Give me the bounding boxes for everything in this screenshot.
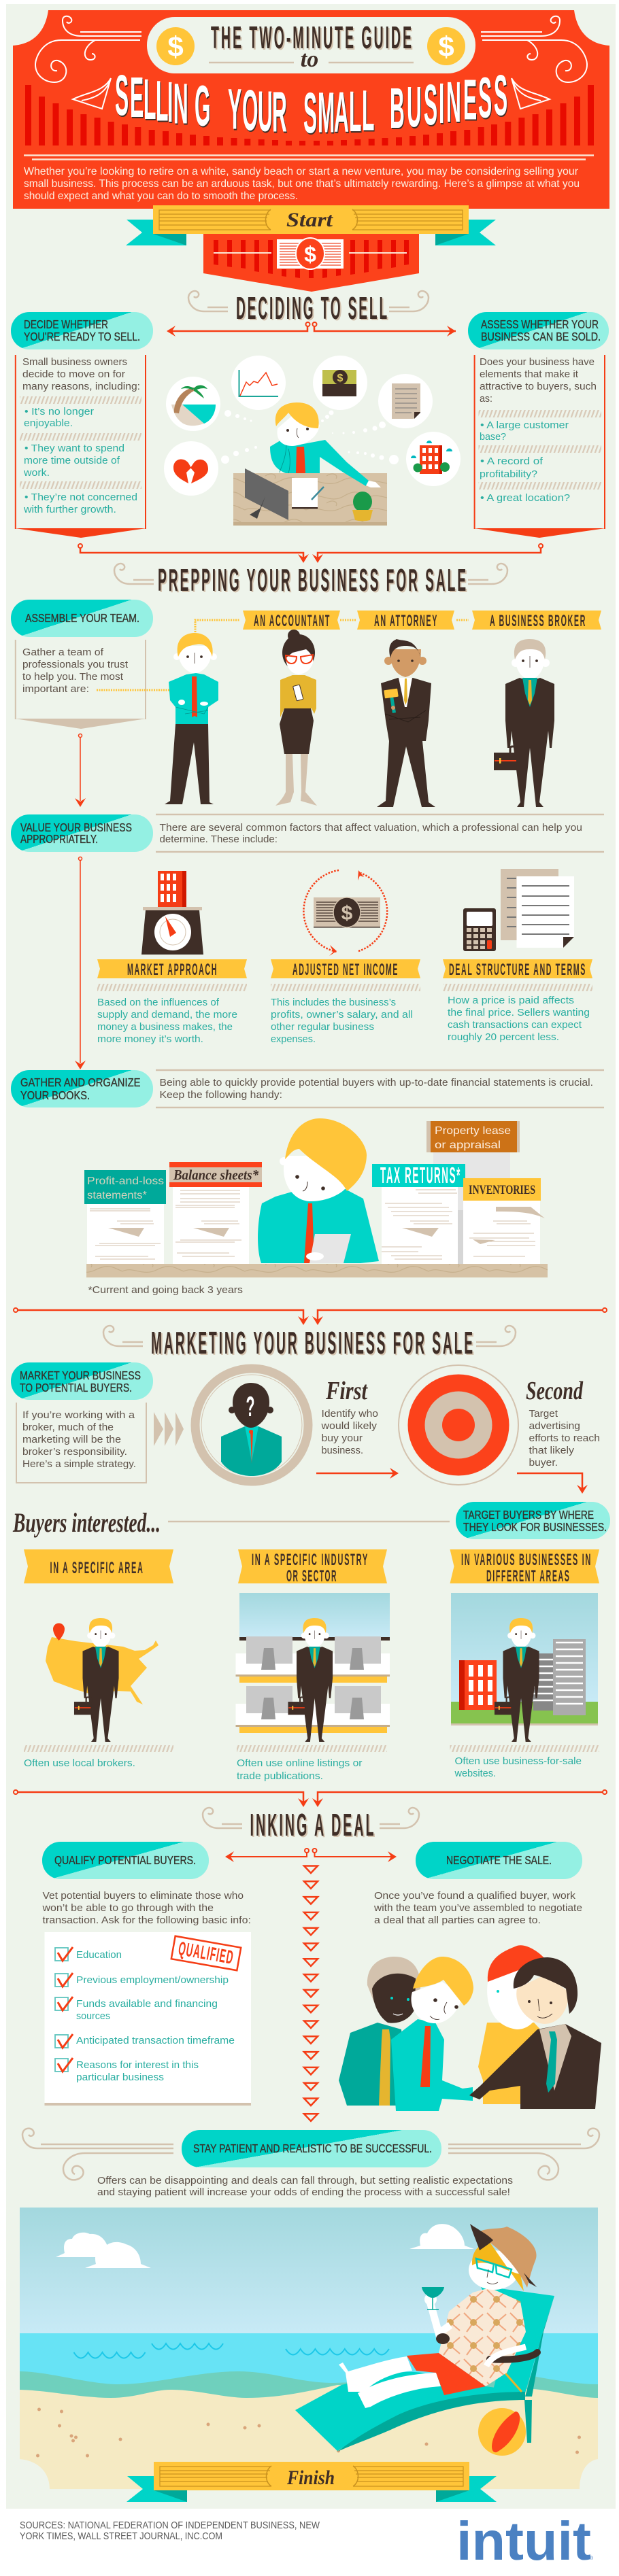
pill: target buyers: [456, 1502, 610, 1539]
arrow: split inking: [225, 1849, 397, 1862]
start pennant: [203, 234, 419, 292]
icon: banknote with cycle arrows: $: [341, 902, 353, 925]
illustration: beach scene: [20, 2208, 598, 2489]
logo: intuit: intuit: [456, 2511, 591, 2571]
panel: reasons to sell: enjoyable.: [24, 417, 73, 429]
figure: blond owner: [165, 633, 218, 804]
person: dark-haired man: [469, 1957, 601, 2109]
stack: property lease: [426, 1121, 520, 1268]
arrow: converge to next section: [78, 544, 543, 563]
banner: accountant: [243, 611, 340, 630]
intro text: [24, 166, 580, 202]
shirt: [270, 440, 369, 486]
footnote: *Current and going back 3 years: [88, 1284, 243, 1296]
text: AN ACCOUNTANT: [254, 612, 331, 630]
icon: broken heart: [173, 460, 208, 483]
text: first step: [320, 1377, 378, 1456]
white scroll ornaments: [35, 16, 587, 109]
icon: cash stack: $: [337, 373, 344, 384]
column: adjusted net income: [271, 959, 420, 1045]
pill: assemble team: ASSEMBLE YOUR TEAM.: [25, 611, 139, 625]
icon: banknote with cycle arrows: [303, 870, 387, 956]
panel: assess the business: base?: [480, 431, 506, 443]
title line two: [115, 64, 507, 145]
panel: assess the business: [474, 355, 605, 538]
panel: broker marketing note: If you’re working with a: [22, 1409, 135, 1421]
flourish: stay patient: [22, 2129, 599, 2180]
column: deal structure: cash transactions can expect: [448, 1019, 582, 1031]
column: adjusted net income: other regular business: [271, 1021, 374, 1033]
panel: assess the business: as:: [480, 393, 492, 405]
panel: qualification checklist: Previous employment/ownership: [76, 1974, 229, 1986]
person: dark-skinned man: [339, 1957, 420, 2106]
text: first step: buy your: [321, 1432, 363, 1444]
text: books intro: Keep the following handy:: [159, 1089, 282, 1101]
text: first step: Identify who: [321, 1408, 378, 1420]
icon: target: [399, 1365, 518, 1485]
panel: reasons to sell: Small business owners: [22, 356, 127, 368]
text: closing advice: and staying patient will increase your odds of ending the process with a successful sale!: [97, 2186, 510, 2198]
icon: cash stack: [322, 370, 356, 396]
intro text: should expect and what you can do to smooth the process.: [24, 190, 298, 202]
column: deal structure: [443, 959, 592, 1043]
column: adjusted net income: expenses.: [271, 1033, 316, 1045]
icon: line graph: [239, 370, 278, 396]
sources: [20, 2520, 320, 2542]
pill: decide whether: YOU’RE READY TO SELL.: [24, 330, 140, 343]
panel: broker marketing note: Here’s a simple strategy.: [22, 1458, 136, 1470]
icon: unknown buyer in ring: [195, 1369, 308, 1481]
icon: banknote: $: [304, 242, 316, 267]
ripples: [73, 2343, 389, 2358]
desk: [233, 473, 387, 522]
person: blond man: [391, 1957, 473, 2111]
text: closing advice: [97, 2175, 513, 2198]
double rule: [24, 155, 594, 159]
panel: header: [13, 10, 609, 209]
text: second step: Second: [526, 1377, 584, 1405]
panel: reasons to sell: more time outside of: [24, 455, 120, 466]
panel: reasons to sell: with further growth.: [23, 504, 116, 515]
sea: [20, 2333, 598, 2398]
panel: assess the business: • A record of: [480, 456, 543, 467]
stack: profit and loss: statements*: [87, 1190, 147, 1201]
column: market approach: supply and demand, the more: [97, 1009, 237, 1020]
caption: online listings: Often use online listings or: [237, 1757, 363, 1769]
caption: business-for-sale: websites.: [454, 1768, 496, 1779]
title line two: SELLING: [115, 64, 211, 138]
title line two: BUSINESS: [390, 64, 507, 141]
text: second step: buyer.: [529, 1457, 558, 1469]
caption: business-for-sale: [450, 1745, 599, 1779]
text: valuation intro: There are several common factors that affect valuation, which a professional can help you: [159, 822, 582, 834]
text: second step: [526, 1377, 600, 1469]
panel: broker marketing note: broker, much of the: [22, 1422, 114, 1433]
text: valuation intro: determine. These include:: [159, 834, 278, 845]
lounge chair: [295, 2286, 554, 2452]
banner: specific industry: OR SECTOR: [286, 1567, 337, 1585]
text: books intro: Being able to quickly provide potential buyers with up-to-date financial statements is crucial.: [159, 1077, 593, 1088]
column: market approach: [97, 959, 247, 1045]
text: vet buyers: [41, 1890, 251, 1926]
pill: qualify buyers: [42, 1842, 209, 1879]
clouds: [56, 2224, 474, 2268]
text: first step: would likely: [320, 1420, 378, 1432]
paper and pen: [292, 478, 324, 509]
banner: attorney: [357, 611, 454, 630]
triangle column: [304, 1866, 318, 2121]
pill: negotiate: NEGOTIATE THE SALE.: [446, 1853, 552, 1867]
illustration: handshake team: [339, 1945, 601, 2111]
dotted connectors: [97, 620, 469, 690]
icon: dollar coin right: [427, 27, 465, 65]
panel: qualification checklist: Education: [76, 1949, 122, 1961]
pill: assemble team: [11, 600, 153, 637]
text: vet buyers: won’t be able to go through with the: [41, 1902, 214, 1914]
panel: broker marketing note: marketing will be the: [22, 1434, 121, 1445]
intro text: small business. This process can be an arduous task, but one that’s ultimately rewarding. Here’s a glimpse at what you: [24, 178, 580, 190]
pill: qualify buyers: QUALIFY POTENTIAL BUYERS.: [54, 1853, 196, 1867]
figure: attorney: [377, 639, 435, 807]
sources: SOURCES: NATIONAL FEDERATION OF INDEPENDENT BUSINESS, NEW: [20, 2520, 320, 2531]
header red panel: [13, 10, 609, 209]
pill: decide whether: [11, 312, 153, 349]
title rules and word to: to: [301, 47, 318, 72]
stack: balance sheets: [169, 1162, 262, 1264]
panel: qualification checklist: Funds available and financing: [76, 1998, 218, 2010]
icon: office building: [411, 441, 452, 474]
shallow water: [20, 2371, 598, 2400]
stack: inventories: INVENTORIES: [469, 1183, 535, 1197]
start banner: Start: [286, 209, 334, 231]
section heading: inking a deal: [203, 1807, 419, 1842]
banner: specific industry: IN A SPECIFIC INDUSTRY: [252, 1551, 369, 1569]
icon: dollar coin left: [156, 27, 195, 65]
panel: assess the business: Does your business have: [480, 356, 595, 368]
pill: negotiate: [416, 1842, 582, 1879]
panel: reasons to sell: • They’re not concerned: [24, 492, 137, 503]
pill: assess whether: [468, 312, 609, 349]
stamp: qualified: [171, 1936, 241, 1970]
column: deal structure: the final price. Sellers wanting: [448, 1007, 590, 1018]
icon: document: [392, 383, 420, 419]
monitor: [245, 468, 288, 520]
text: first step: First: [325, 1377, 368, 1405]
icon: dollar coin left: $: [167, 31, 184, 63]
arrow: converge to marketing: [14, 1308, 607, 1325]
column: adjusted net income: profits, owner’s salary, and all: [271, 1009, 413, 1020]
arrow: two way split: [167, 322, 456, 337]
panel: assess the business: • A great location?: [480, 492, 570, 504]
chevrons: [154, 1412, 184, 1446]
panel: reasons to sell: many reasons, including:: [22, 381, 140, 392]
wooden shelf: [86, 1264, 548, 1277]
pill: gather books: GATHER AND ORGANIZE: [20, 1076, 140, 1089]
beach ball: [478, 2408, 526, 2456]
caption: online listings: trade publications.: [237, 1770, 323, 1782]
pill: gather books: [11, 1070, 153, 1107]
panel: assess the business: attractive to buyers, such: [480, 381, 597, 392]
panel: assess the business: elements that make it: [480, 368, 579, 380]
icon: banknote: [277, 238, 344, 269]
text: negotiate: Once you’ve found a qualified buyer, work: [374, 1890, 576, 1902]
plant: [352, 492, 373, 521]
illustration: US map with broker: [46, 1618, 158, 1742]
column: adjusted net income: ADJUSTED NET INCOME: [292, 961, 399, 979]
caption: online listings: [237, 1745, 387, 1782]
icon: cocktail: [422, 2287, 444, 2309]
heading: buyers interested: Buyers interested...: [12, 1507, 161, 1538]
panel: assess the business: profitability?: [480, 468, 537, 480]
pill: market your business: MARKET YOUR BUSINESS: [20, 1369, 141, 1382]
column: deal structure: roughly 20 percent less.: [448, 1031, 559, 1043]
sources: YORK TIMES, WALL STREET JOURNAL, INC.COM: [20, 2530, 222, 2542]
panel: reasons to sell: work.: [23, 467, 50, 479]
sky: [20, 2208, 598, 2333]
column: deal structure: How a price is paid affects: [448, 995, 574, 1006]
banner: specific area: IN A SPECIFIC AREA: [50, 1559, 144, 1577]
stack: inventories: [463, 1178, 545, 1264]
panel: gather a team: [15, 640, 146, 729]
panel: gather a team: professionals you trust: [22, 659, 129, 670]
pill: market your business: TO POTENTIAL BUYERS.: [20, 1381, 132, 1394]
caption: local brokers: [24, 1745, 173, 1769]
arrow: team to value: [75, 734, 86, 807]
sand specks: [36, 2408, 581, 2457]
text: negotiate: with the team you’ve assembled to negotiate: [373, 1902, 582, 1914]
stamp: qualified: QUALIFIED: [177, 1938, 235, 1968]
arrow: second to target buyers: [517, 1473, 588, 1494]
figure: accountant: [275, 630, 317, 806]
panel: qualification checklist: particular business: [76, 2072, 164, 2083]
banner: specific industry: [238, 1549, 387, 1585]
pill: value your business: [11, 814, 153, 852]
panel: reasons to sell: • They want to spend: [24, 443, 124, 454]
stack: property lease: Property lease: [435, 1125, 511, 1137]
curved stripes: [25, 85, 594, 145]
stack: balance sheets: Balance sheets*: [173, 1167, 258, 1183]
column: adjusted net income: This includes the business’s: [271, 997, 396, 1008]
column: market approach: Based on the influences of: [97, 997, 220, 1008]
stack: profit and loss: Profit-and-loss: [87, 1175, 164, 1187]
illustration: document stacks: TAX RETURNS*: [380, 1163, 461, 1188]
finish banner: Finish: [286, 2467, 335, 2489]
finish banner: [127, 2462, 497, 2502]
text: negotiate: a deal that all parties can agree to.: [374, 1914, 541, 1926]
arrow: value to books: [75, 857, 86, 1069]
icon: unknown buyer in ring: ?: [246, 1390, 254, 1422]
text: second step: that likely: [529, 1445, 575, 1456]
caption: business-for-sale: Often use business-for-sale: [454, 1755, 582, 1767]
panel: reasons to sell: decide to move on for: [22, 368, 125, 380]
pill: stay patient: STAY PATIENT AND REALISTIC TO BE SUCCESSFUL.: [193, 2142, 432, 2155]
text: closing advice: Offers can be disappointing and deals can fall through, but setting realistic expectations: [97, 2175, 513, 2186]
text: vet buyers: Vet potential buyers to eliminate those who: [42, 1890, 244, 1902]
banner: specific area: [24, 1549, 173, 1583]
figure: business broker: [494, 639, 554, 807]
section heading: deciding to sell: [188, 290, 429, 326]
text: vet buyers: transaction. Ask for the following basic info:: [42, 1914, 251, 1926]
stack: property lease: or appraisal: [435, 1139, 501, 1151]
text: books intro: [156, 1070, 604, 1107]
illustration: business-for-sale websites: [451, 1593, 598, 1742]
title line two: YOUR: [228, 78, 287, 144]
reclining man: [339, 2224, 537, 2408]
arrow: converge to inking: [14, 1790, 607, 1807]
column: market approach: more money it’s worth.: [97, 1033, 203, 1045]
man reading: [258, 1118, 379, 1263]
banner: various businesses: [450, 1549, 599, 1585]
sand: [20, 2385, 598, 2489]
person: red-haired woman: [478, 1945, 550, 2104]
illustration: man at desk: [233, 402, 387, 526]
illustration: online listings: [235, 1593, 390, 1742]
panel: reasons to sell: • It’s no longer: [24, 406, 94, 417]
head: [278, 411, 320, 446]
icon: palm beach: [171, 385, 216, 426]
pill: value your business: APPROPRIATELY.: [20, 832, 98, 846]
panel: broker marketing note: broker’s responsibility.: [22, 1446, 127, 1458]
title pill: [147, 17, 475, 73]
start banner: [126, 205, 496, 245]
panel: gather a team: important are:: [22, 683, 89, 695]
text: second step: advertising: [529, 1420, 580, 1432]
pill: market your business: [11, 1362, 153, 1400]
arrow: first to second: [316, 1468, 399, 1479]
icon: gavel: [384, 689, 399, 713]
pill: stay patient: [182, 2130, 441, 2167]
stack: profit and loss: [84, 1170, 166, 1264]
logo: intuit: ®: [590, 2556, 594, 2561]
section heading: prepping: [114, 562, 507, 598]
column: market approach: money a business makes, the: [97, 1021, 233, 1033]
text: first step: business.: [321, 1445, 363, 1456]
panel: assess the business: • A large customer: [480, 419, 569, 431]
illustration: document stacks: [84, 1118, 548, 1277]
caption: local brokers: Often use local brokers.: [24, 1757, 135, 1769]
panel: qualification checklist: sources: [76, 2010, 110, 2022]
stack: tax returns: [372, 1163, 465, 1264]
panel: reasons to sell: [15, 355, 146, 538]
pill: gather books: YOUR BOOKS.: [20, 1088, 90, 1102]
pill: decide whether: DECIDE WHETHER: [24, 317, 108, 331]
panel: gather a team: Gather a team of: [22, 647, 104, 658]
intro text: Whether you’re looking to retire on a white, sandy beach or start a new venture, you may be considering selling your: [24, 166, 579, 177]
panel: qualification checklist: Reasons for interest in this: [76, 2059, 199, 2071]
pill: value your business: VALUE YOUR BUSINESS: [20, 821, 132, 834]
column: market approach: MARKET APPROACH: [127, 961, 218, 979]
section heading: deciding to sell: DECIDING TO SELL: [236, 290, 389, 326]
text: valuation intro: [156, 814, 604, 852]
text: second step: Target: [529, 1408, 558, 1420]
panel: qualification checklist: Anticipated transaction timeframe: [76, 2035, 235, 2046]
panel: broker marketing note: [16, 1403, 146, 1483]
panel: qualification checklist: [45, 1932, 251, 2106]
panel: gather a team: to help you. The most: [22, 671, 124, 683]
icon: calculator and documents: [463, 869, 574, 951]
text: negotiate: [373, 1890, 582, 1926]
thought bubbles: [164, 356, 461, 496]
icon: scale with building: [141, 871, 203, 955]
banner: attorney: AN ATTORNEY: [374, 612, 438, 630]
section heading: inking a deal: INKING A DEAL: [250, 1807, 375, 1842]
title line two: SMALL: [303, 80, 374, 145]
text: second step: efforts to reach: [529, 1432, 600, 1444]
icon: dollar coin right: $: [438, 31, 454, 63]
